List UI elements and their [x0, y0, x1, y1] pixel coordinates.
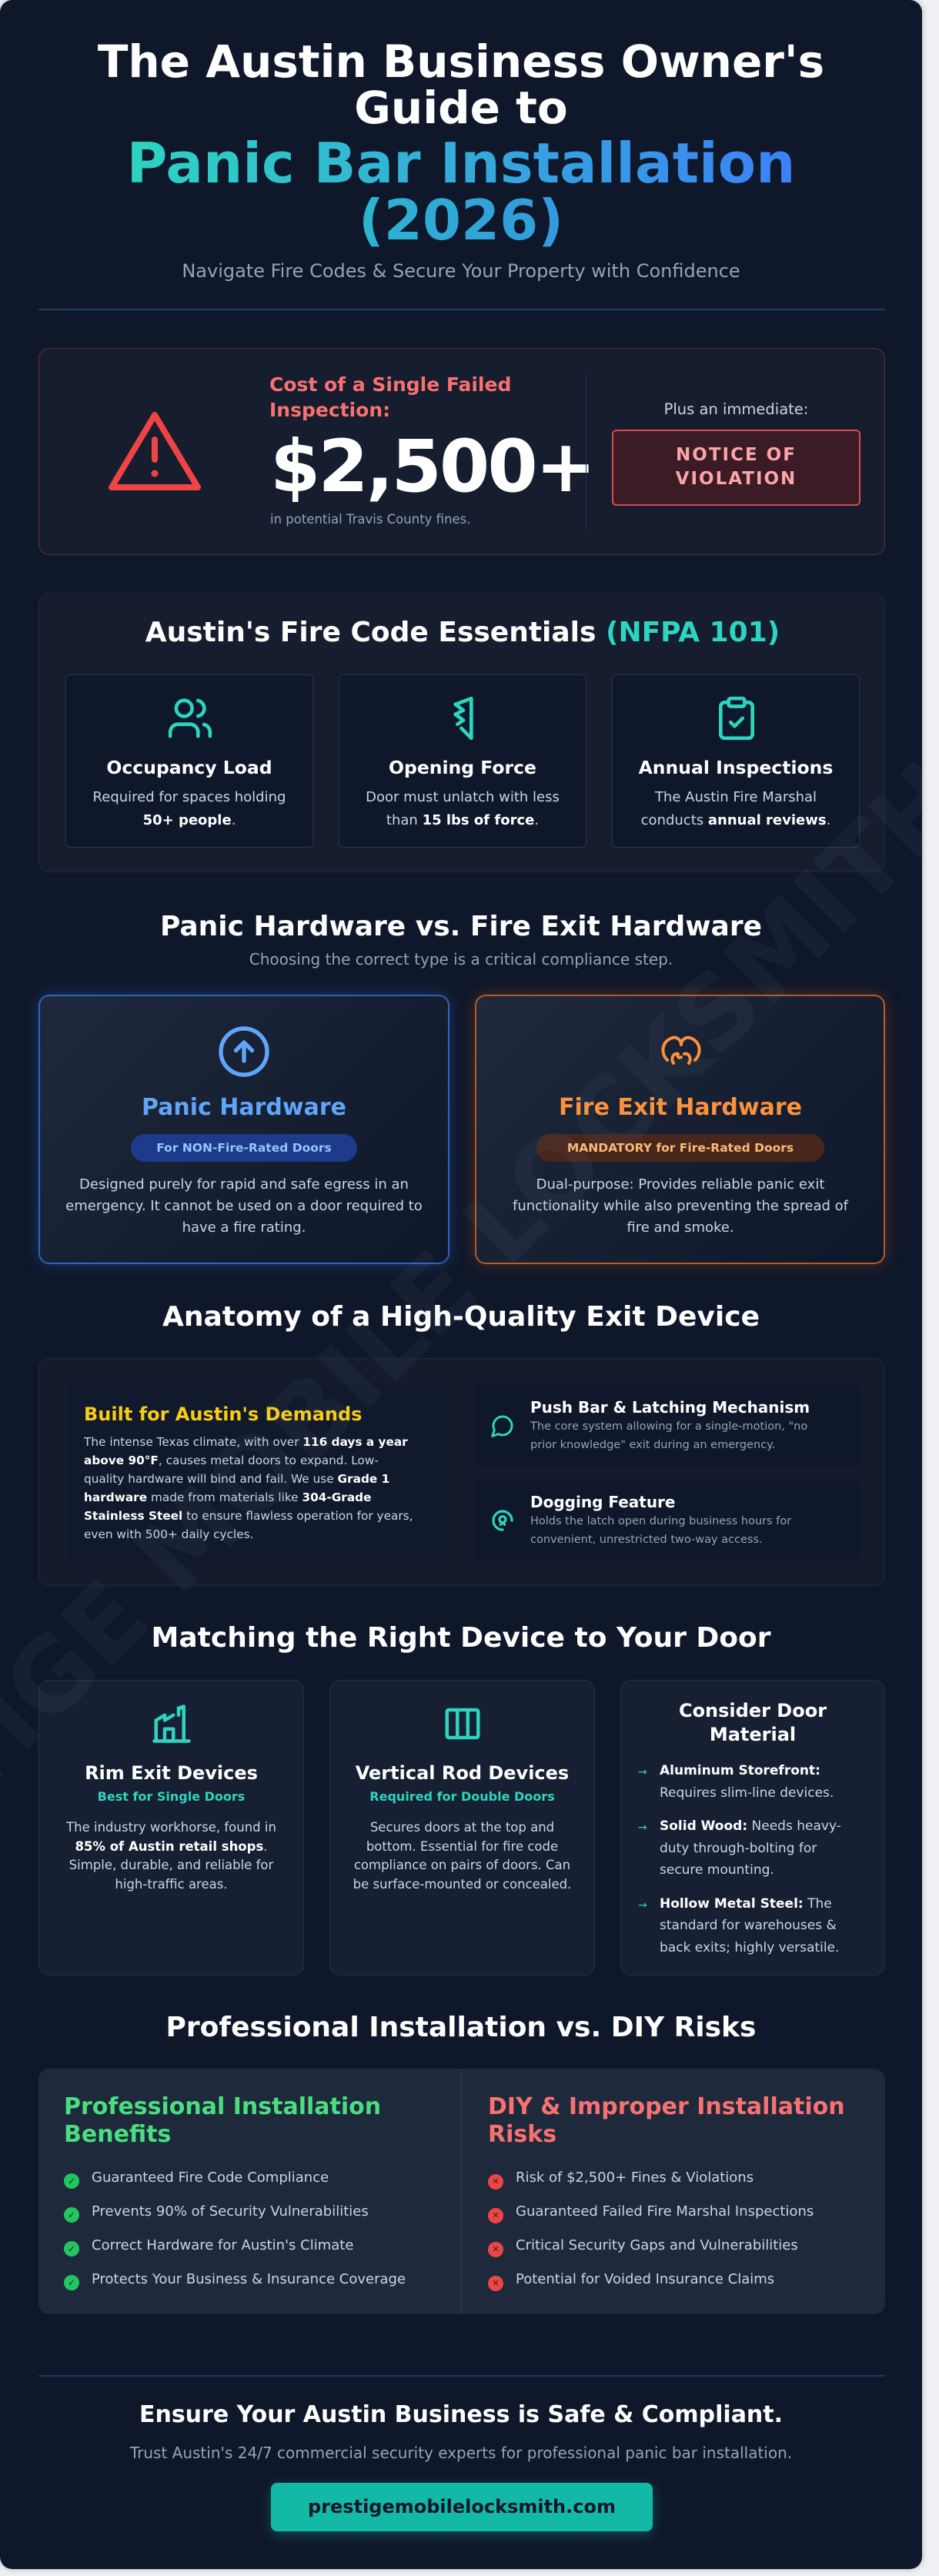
callout: notice of violation: VIOLATION [676, 469, 797, 489]
column: benefits [64, 2093, 406, 2290]
card: vertical rod: Vertical Rod Devices [356, 1762, 569, 1784]
list: materials: back exits; highly versatile. [660, 1940, 839, 1955]
icon: dogging [492, 1510, 513, 1531]
panel: panic hardware: have a fire rating. [182, 1219, 306, 1236]
list: materials: secure mounting. [660, 1862, 774, 1878]
column: benefits: ✓ [68, 2277, 75, 2288]
pill: MANDATORY for Fire-Rated Doors [567, 1141, 794, 1155]
card: vertical rod: Required for Double Doors [369, 1789, 555, 1804]
button: website [271, 2483, 653, 2531]
text block: built for austin: Built for Austin's Demands [84, 1403, 362, 1425]
panel: fire code essentials [38, 593, 885, 872]
card: rim exit: Rim Exit Devices [85, 1762, 258, 1784]
icon: factory [152, 1705, 191, 1743]
card: rim exit [38, 1680, 304, 1975]
list: materials: Requires slim-line devices. [660, 1785, 834, 1800]
text block: built for austin: even with 500+ daily cycles. [84, 1527, 254, 1541]
card: vertical rod [329, 1680, 595, 1975]
column: risks: Risk of $2,500+ Fines & Violations [516, 2170, 754, 2186]
list: materials: Solid Wood: Needs heavy- [660, 1818, 841, 1834]
card: opening force: than 15 lbs of force. [386, 812, 539, 828]
pill: For NON-Fire-Rated Doors [156, 1141, 332, 1155]
card: door material [620, 1680, 885, 1975]
column: benefits: Benefits [64, 2121, 171, 2148]
icon: arrow up circle [219, 1026, 269, 1077]
text block: built for austin: Stainless Steel to ensure flawless operation for years, [84, 1509, 413, 1523]
card: opening force: Opening Force [389, 757, 536, 778]
list: materials: duty through-bolting for [660, 1840, 817, 1855]
feature: push bar: Push Bar & Latching Mechanism [530, 1398, 810, 1417]
card: door material: → [638, 1766, 647, 1778]
column: risks [488, 2093, 845, 2291]
title [98, 35, 824, 253]
icon: columns [445, 1708, 480, 1740]
panel: panic hardware: Panic Hardware [142, 1094, 346, 1121]
panel: fire exit hardware: Dual-purpose: Provides reliable panic exit [536, 1176, 824, 1193]
feature: push bar: prior knowledge" exit during an emergency. [530, 1439, 775, 1451]
icon: users [168, 698, 212, 738]
heading: pro vs diy: Professional Installation vs. DIY Risks [166, 2012, 756, 2043]
title: (2026) [359, 188, 563, 253]
panel: panic hardware: emergency. It cannot be used on a door required to [65, 1198, 423, 1214]
column: benefits: ✓ [68, 2210, 75, 2220]
text block: built for austin: hardware made from materials like 304-Grade [84, 1490, 371, 1504]
card: rim exit: The industry workhorse, found in [66, 1820, 276, 1835]
column: risks: DIY & Improper Installation [488, 2093, 845, 2120]
panel: fire exit hardware: functionality while also preventing the spread of [513, 1198, 848, 1214]
panel: failed inspection cost [38, 348, 885, 555]
footer text: Trust Austin's 24/7 commercial security experts for professional panic bar installation. [130, 2444, 792, 2462]
card: annual inspections: Annual Inspections [639, 757, 833, 778]
column: risks: ✕ [492, 2278, 500, 2288]
title: Guide to [354, 82, 568, 134]
list: materials: Aluminum Storefront: [660, 1763, 820, 1778]
callout: notice of violation: NOTICE OF [676, 445, 797, 465]
cost label [269, 373, 511, 421]
heading: panic vs fire exit: Panic Hardware vs. Fire Exit Hardware [160, 911, 762, 942]
panel: panic hardware [38, 995, 449, 1264]
text block: built for austin: The intense Texas climate, with over 116 days a year [84, 1435, 408, 1449]
icon: warning [109, 412, 201, 490]
text block: built for austin [65, 1383, 449, 1562]
panel: pro vs diy [38, 2069, 885, 2314]
big number: $2,500+ [270, 425, 594, 509]
card: opening force [339, 674, 586, 848]
feature: push bar: The core system allowing for a single-motion, "no [530, 1420, 807, 1433]
card: vertical rod: Secures doors at the top and [370, 1820, 554, 1835]
column: risks: Potential for Voided Insurance Claims [516, 2271, 774, 2287]
pill [536, 1134, 824, 1162]
list: materials [638, 1763, 841, 1955]
card: annual inspections [612, 674, 860, 848]
title: The Austin Business Owner's [98, 35, 824, 88]
card: vertical rod: compliance on pairs of doors. Can [354, 1858, 570, 1872]
card: door material: Material [710, 1724, 796, 1745]
icon: flame [661, 1036, 701, 1066]
panel: fire exit hardware: fire and smoke. [627, 1219, 734, 1236]
column: risks: Critical Security Gaps and Vulnerabilities [516, 2237, 798, 2253]
card: rim exit: 85% of Austin retail shops. [75, 1838, 268, 1854]
column: risks: ✕ [492, 2244, 500, 2254]
panel: anatomy [38, 1358, 885, 1586]
column: benefits: Protects Your Business & Insurance Coverage [92, 2271, 406, 2287]
list: materials: standard for warehouses & [660, 1918, 837, 1933]
card: door material: Consider Door [679, 1700, 827, 1721]
card: door material: → [638, 1899, 647, 1911]
column: risks: Risks [488, 2121, 556, 2148]
card: occupancy [65, 674, 313, 848]
icon: chat bubble [491, 1415, 513, 1437]
card: rim exit: high-traffic areas. [115, 1877, 228, 1891]
card: door material: → [638, 1822, 647, 1834]
card: rim exit: Best for Single Doors [98, 1789, 245, 1804]
feature: dogging: Holds the latch open during business hours for [530, 1515, 791, 1527]
feature: dogging: Dogging Feature [530, 1493, 676, 1511]
subtitle: Navigate Fire Codes & Secure Your Property with Confidence [182, 260, 740, 282]
feature: push bar [475, 1384, 860, 1467]
subheading: Choosing the correct type is a critical compliance step. [249, 950, 673, 969]
card: vertical rod: be surface-mounted or concealed. [353, 1877, 571, 1891]
card: vertical rod: bottom. Essential for fire code [366, 1838, 558, 1854]
column: benefits: ✓ [68, 2243, 75, 2254]
panel: fire exit hardware: Fire Exit Hardware [559, 1094, 802, 1121]
button: website: prestigemobilelocksmith.com [308, 2496, 616, 2517]
feature: dogging: convenient, unrestricted two-way access. [530, 1534, 763, 1546]
card: occupancy: Occupancy Load [106, 757, 272, 778]
card: annual inspections: conducts annual reviews. [641, 812, 830, 828]
column: benefits: Correct Hardware for Austin's Climate [92, 2237, 353, 2253]
card: annual inspections: The Austin Fire Marshal [655, 789, 817, 805]
heading: Austin's Fire Code Essentials (NFPA 101) [145, 617, 780, 648]
title: Panic Bar Installation [127, 131, 795, 196]
text block: built for austin: quality hardware will bind and fail. We use Grade 1 [84, 1472, 389, 1486]
column: risks: Guaranteed Failed Fire Marshal Inspections [516, 2203, 814, 2220]
plus an immediate: Plus an immediate: [664, 400, 808, 418]
fines note: in potential Travis County fines. [270, 512, 471, 527]
icon: hand [453, 696, 473, 741]
card: occupancy: Required for spaces holding [93, 789, 286, 805]
pill [131, 1134, 357, 1162]
cost label: Cost of a Single Failed [269, 373, 511, 396]
card: rim exit: Simple, durable, and reliable for [69, 1858, 273, 1872]
footer heading: Ensure Your Austin Business is Safe & Compliant. [139, 2401, 783, 2428]
panel: fire exit hardware [475, 995, 885, 1264]
card: occupancy: 50+ people. [143, 812, 236, 828]
column: benefits: ✓ [68, 2176, 75, 2186]
cost label: Inspection: [269, 399, 390, 421]
card: opening force: Door must unlatch with less [366, 789, 560, 805]
text block: built for austin: above 90°F, causes metal doors to expand. Low- [84, 1454, 379, 1467]
feature: dogging [475, 1479, 860, 1561]
column: benefits: Professional Installation [64, 2093, 381, 2120]
heading: matching: Matching the Right Device to Your Door [152, 1622, 770, 1654]
heading: anatomy: Anatomy of a High-Quality Exit Device [162, 1301, 760, 1333]
list: materials: Hollow Metal Steel: The [660, 1895, 832, 1911]
column: risks: ✕ [492, 2210, 500, 2220]
icon: clipboard check [719, 696, 754, 741]
callout: notice of violation [612, 430, 860, 506]
column: benefits: Guaranteed Fire Code Compliance [92, 2170, 329, 2186]
column: risks: ✕ [492, 2176, 500, 2186]
panel: panic hardware: Designed purely for rapid and safe egress in an [79, 1176, 409, 1193]
column: benefits: Prevents 90% of Security Vulnerabilities [92, 2203, 369, 2220]
